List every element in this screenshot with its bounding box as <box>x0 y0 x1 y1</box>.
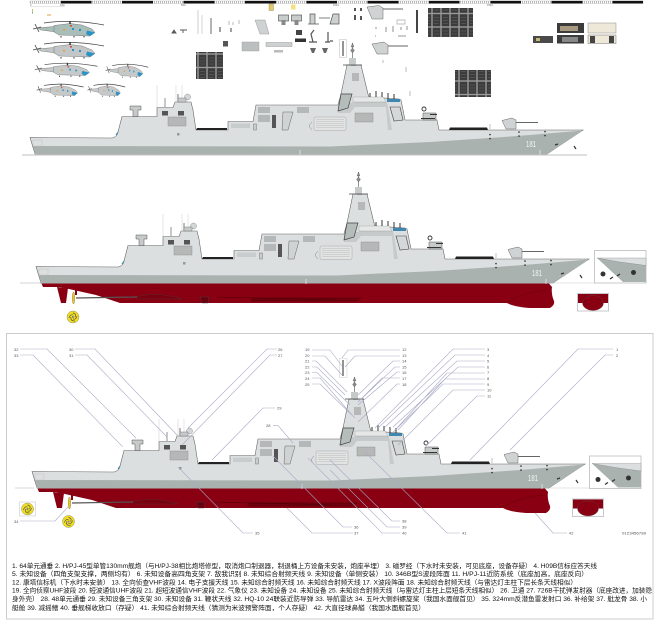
radar array panel: 4x2 <box>455 70 491 97</box>
callout numbers: 8 <box>487 376 490 381</box>
callout numbers: 28 <box>266 423 271 428</box>
parts: mounts and boxes <box>223 4 361 58</box>
legend text block: 身外壳） 28. 48单元通垂 29. 未知设备三角支架 30. 未知设备 31. 鞭状天线 32. HQ-10 24联装近防导弹 33. 导航雷达 34. 五叶大侧斜螺旋桨（我国水面舰首见） 35. 324mm反潜鱼雷发射口 36. 补给架 37. 舭龙骨 38. 小 <box>12 594 648 603</box>
scale ruler: 0 <box>30 4 32 7</box>
panel frame: annotated view <box>6 334 653 619</box>
serial number: 0123456789 <box>622 530 647 536</box>
callout numbers: 35 <box>255 530 260 536</box>
propeller inset <box>20 502 36 516</box>
callout numbers: 12 <box>402 347 407 352</box>
callout numbers: 36 <box>354 524 359 530</box>
callout numbers: 18 <box>402 382 407 387</box>
callout numbers: 17 <box>402 376 407 381</box>
scale ruler: 50m <box>181 4 186 7</box>
ship profile: annotated hull view <box>15 377 592 513</box>
callout numbers: 19 <box>305 347 310 352</box>
legend text block: 1. 64单元通垂 2. H/PJ-45型单管130mm舰炮（与H/PJ-38相比炮塔修型，取消炮口制退器，制退桶上方设备未安装，炮座半埋） 3. 磁罗经（下水时未安装，可见底座，设备存疑） 4. H09B信标应答天线 <box>12 561 598 570</box>
callout numbers: 27 <box>278 353 283 358</box>
interior cutaway drawings <box>533 23 616 44</box>
legend text block <box>12 561 653 612</box>
callout numbers: 1 <box>616 347 619 352</box>
callout leader lines <box>20 349 613 533</box>
legend text block: 12. 康塔信标机（下水时未安装） 13. 全向侦查VHF波段 14. 电子支援天线 15. 未知综合射频天线 16. 未知综合射频天线 17. X波段阵面 18. 未知综合射频天线（与雷达灯主柱下层长条天线相似） <box>12 578 577 586</box>
parts: small marks <box>32 9 410 96</box>
mast detail inset <box>340 358 347 378</box>
callout numbers: 42 <box>569 530 574 536</box>
callout numbers: 25 <box>305 382 310 387</box>
callout numbers: 7 <box>487 370 490 375</box>
callout numbers: 32 <box>14 347 19 352</box>
propeller, middle view <box>67 311 79 323</box>
callout numbers: 39 <box>402 524 407 530</box>
callout numbers: 9 <box>487 382 490 387</box>
ship profile: full hull view <box>20 172 596 308</box>
callout numbers: 21 <box>305 358 310 364</box>
callout numbers: 16 <box>402 370 407 375</box>
callout numbers: 40 <box>402 530 407 536</box>
callout numbers: 37 <box>354 530 359 536</box>
callout numbers: 14 <box>402 358 407 364</box>
bow detail insets, middle view <box>578 250 646 311</box>
scale ruler: 100m <box>333 4 339 7</box>
callout numbers <box>14 347 619 536</box>
callout numbers: 13 <box>402 353 407 358</box>
callout numbers: 29 <box>277 406 282 410</box>
parts: gun turrets <box>367 6 418 54</box>
callout numbers: 2 <box>616 353 619 358</box>
scale ruler: 150m <box>487 4 493 7</box>
callout numbers: 30 <box>69 347 74 352</box>
propeller, annotated view <box>62 516 74 528</box>
callout numbers: 11 <box>487 394 492 398</box>
ship profile: waterline view <box>22 43 587 155</box>
scale ruler <box>30 1 643 7</box>
callout numbers: 26 <box>278 347 283 352</box>
callout numbers: 34 <box>14 519 19 524</box>
callout numbers: 38 <box>402 518 407 524</box>
bow detail insets, annotated view <box>572 456 641 516</box>
callout numbers: 23 <box>305 370 310 375</box>
callout numbers: 15 <box>402 364 407 370</box>
legend text block: 5. 未知设备（四角支架支撑，两侧均有） 6. 未知设备高四角支架 7. 敌我识别 8. 未知综合射频天线 9. 未知设备（单侧安装） 10. 346B型S波段阵面 11. H/PJ-11近防系统（底座加高，底座反向） <box>12 569 588 578</box>
callout numbers: 33 <box>14 353 19 358</box>
callout numbers: 20 <box>305 353 310 358</box>
callout numbers: 31 <box>69 353 74 358</box>
callout numbers: 5 <box>487 358 490 364</box>
callout numbers: 22 <box>305 364 310 370</box>
callout numbers: 6 <box>487 364 490 370</box>
callout numbers: 24 <box>305 376 310 381</box>
callout numbers: 3 <box>487 347 490 352</box>
callout numbers: 10 <box>487 388 492 392</box>
callout numbers: 41 <box>462 530 467 536</box>
helicopters <box>33 21 148 97</box>
legend text block: 艇舱 39. 减摇鳍 40. 垂舰梯收放口（存疑） 41. 未知综合射频天线（猜测为米波预警阵面，个人存疑） 42. 大直径球鼻艏（我国水面舰首见） <box>12 603 425 612</box>
legend text block: 19. 全向侦察UHF波段 20. 短波通信UHF波段 21. 超短波通信VHF波段 22. 气象仪 23. 未知设备 24. 未知设备 25. 未知综合射频天线（与雷达灯主柱上层短条天线相似） 26. 卫通 27. 726B干扰弹发射器（底座改进，加装隐 <box>12 586 653 594</box>
radar array panel: 3x2 <box>196 52 223 79</box>
callout numbers: 4 <box>487 353 490 358</box>
radar array panel: 5x2 <box>428 8 473 37</box>
scale ruler: 10m <box>60 4 65 7</box>
